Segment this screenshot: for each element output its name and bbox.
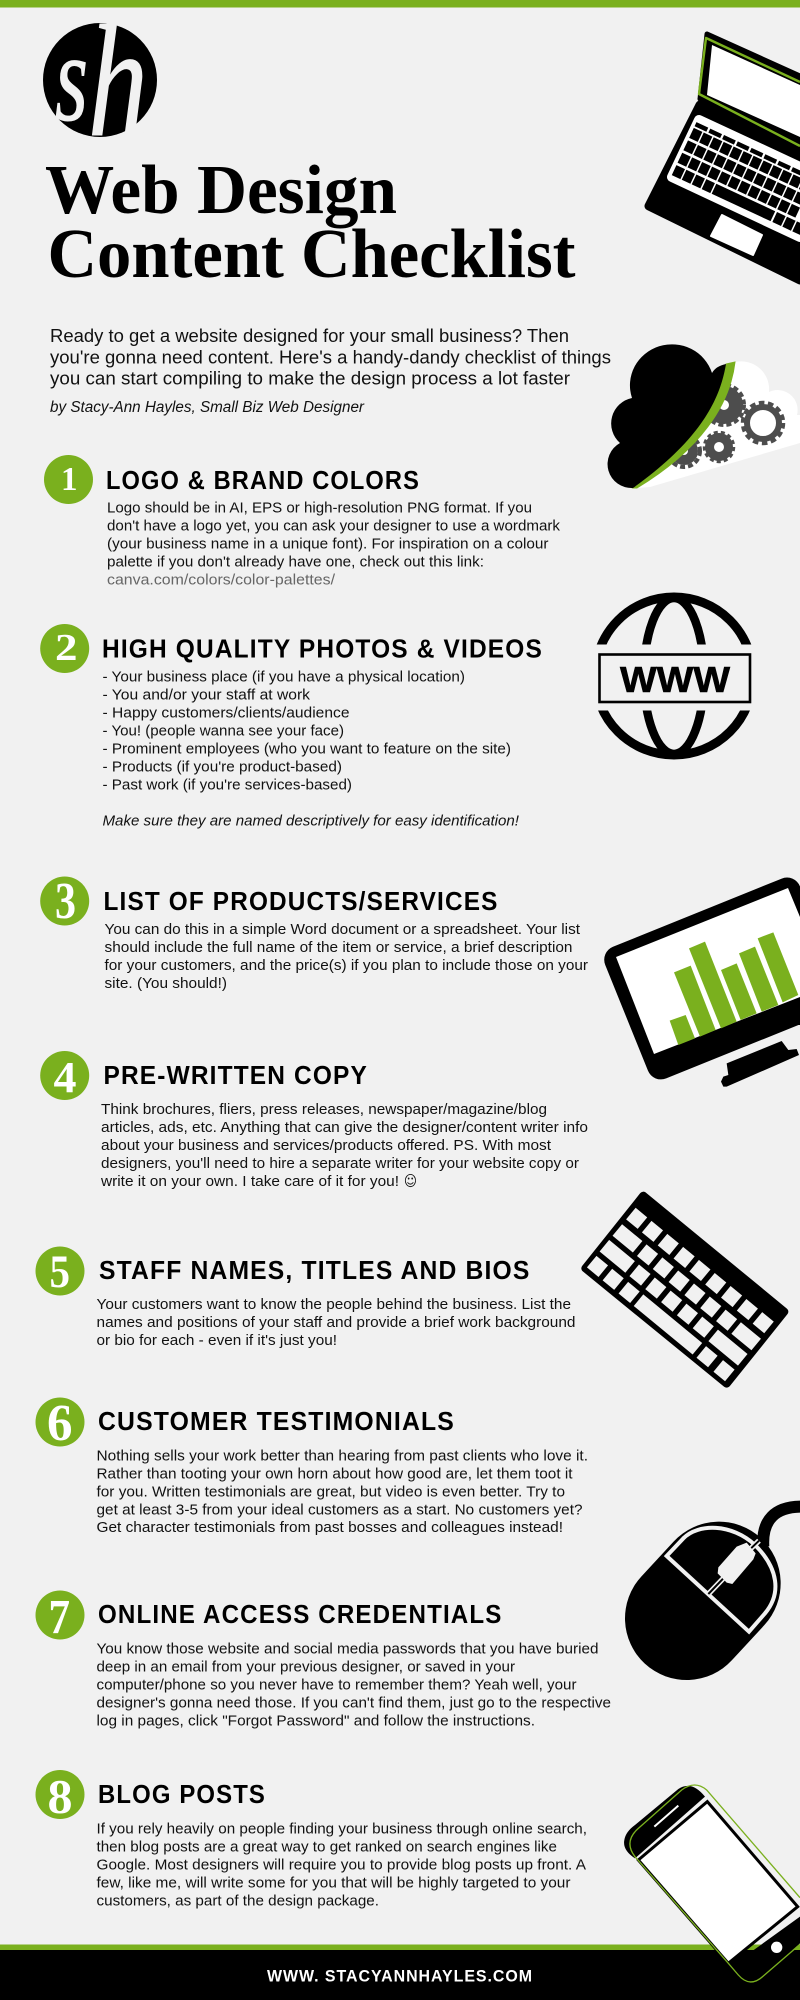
number badge 6: 6 xyxy=(47,1395,72,1452)
number badge 4: 4 xyxy=(54,1053,76,1102)
body text 4: Think brochures, fliers, press releases, newspaper/magazine/blog xyxy=(101,1102,547,1118)
section 5: staff names xyxy=(36,1246,576,1349)
body text 8: few, like me, will write some for you that will be highly targeted to your xyxy=(96,1876,571,1892)
icon: www globe xyxy=(595,597,753,755)
body text 1 xyxy=(107,501,561,589)
icon: monitor with bar chart xyxy=(600,873,800,1087)
body text 3: site. (You should!) xyxy=(104,976,227,992)
body list 2: - Products (if you're product-based) xyxy=(102,760,342,776)
body text 3: You can do this in a simple Word document or a spreadsheet. Your list xyxy=(104,922,580,938)
icon: keyboard xyxy=(585,1196,784,1384)
intro text xyxy=(50,325,611,388)
number badge 3: 3 xyxy=(55,873,76,930)
body text 3 xyxy=(104,922,588,992)
number badge 5 xyxy=(36,1246,84,1298)
italic note 2: Make sure they are named descriptively for easy identification! xyxy=(102,814,519,830)
body text 5: or bio for each - even if it's just you! xyxy=(96,1333,337,1349)
heading 7: ONLINE ACCESS CREDENTIALS xyxy=(98,1601,502,1629)
heading 4: PRE-WRITTEN COPY xyxy=(104,1062,368,1090)
body text 3: should include the full name of the item or service, a brief description xyxy=(104,940,572,956)
body text 7 xyxy=(96,1642,611,1730)
body text 1: Logo should be in AI, EPS or high-resolution PNG format. If you xyxy=(107,501,532,517)
number badge 8 xyxy=(36,1769,84,1824)
body text 6 xyxy=(96,1448,588,1536)
heading 3: LIST OF PRODUCTS/SERVICES xyxy=(104,888,498,916)
body text 7: You know those website and social media passwords that you have buried xyxy=(96,1642,598,1658)
body text 4: write it on your own. I take care of it for you! xyxy=(100,1174,399,1190)
footer band xyxy=(0,1944,800,2000)
number badge 5: 5 xyxy=(50,1246,70,1298)
body text 4: articles, ads, etc. Anything that can give the designer/content writer info xyxy=(101,1120,588,1136)
body text 6: Get character testimonials from past bosses and colleagues instead! xyxy=(96,1520,563,1536)
top green bar xyxy=(0,0,800,8)
section 3: products and services xyxy=(40,873,588,992)
intro text: Ready to get a website designed for your small business? Then xyxy=(50,325,569,346)
body text 7: log in pages, click "Forgot Password" and follow the instructions. xyxy=(96,1714,535,1730)
body text 1: canva.com/colors/color-palettes/ xyxy=(107,573,336,589)
body text 6: Nothing sells your work better than hearing from past clients who love it. xyxy=(96,1448,588,1464)
body text 6: get at least 3-5 from your ideal customers as a start. No customers yet? xyxy=(96,1502,582,1518)
body text 6: for you. Written testimonials are great, but video is even better. Try to xyxy=(96,1484,565,1500)
logo: sh monogram: s xyxy=(55,10,88,148)
heading 2: HIGH QUALITY PHOTOS & VIDEOS xyxy=(102,636,543,664)
body text 4: ☺ xyxy=(404,1172,417,1190)
body text 3: for your customers, and the price(s) if you plan to include those on your xyxy=(104,958,588,974)
number badge 1: 1 xyxy=(61,461,78,498)
body text 5: Your customers want to know the people behind the business. List the xyxy=(96,1297,571,1313)
section 1: logo and brand colors xyxy=(44,455,561,589)
body text 8: If you rely heavily on people finding your business through online search, xyxy=(96,1822,587,1838)
body list 2: - Prominent employees (who you want to feature on the site) xyxy=(102,742,511,758)
body list 2: - You and/or your staff at work xyxy=(102,688,311,704)
body text 8: Google. Most designers will require you to provide blog posts up front. A xyxy=(96,1858,586,1874)
heading 6: CUSTOMER TESTIMONIALS xyxy=(98,1408,455,1436)
body text 6: Rather than tooting your own horn about how good are, let them toot it xyxy=(96,1466,572,1482)
number badge 2: 2 xyxy=(55,627,78,669)
number badge 7 xyxy=(36,1589,84,1644)
body text 4 xyxy=(100,1102,588,1190)
icon: cloud with gears xyxy=(608,344,800,488)
byline: by Stacy-Ann Hayles, Small Biz Web Designer xyxy=(50,399,365,416)
icon: www globe: WWW xyxy=(620,659,730,700)
body text 7: designer's gonna need those. If you can't find them, just go to the respective xyxy=(96,1696,611,1712)
body text 1: don't have a logo yet, you can ask your designer to use a wordmark xyxy=(107,519,561,535)
section 7: online access credentials xyxy=(36,1589,611,1730)
number badge 6 xyxy=(36,1395,84,1452)
body text 5: names and positions of your staff and provide a brief work background xyxy=(96,1315,576,1331)
logo: sh monogram xyxy=(43,0,157,170)
icon: laptop xyxy=(649,34,800,280)
body list 2 xyxy=(102,670,511,794)
heading 1: LOGO & BRAND COLORS xyxy=(106,467,420,495)
number badge 8: 8 xyxy=(48,1769,72,1824)
body list 2: - Your business place (if you have a physical location) xyxy=(102,670,465,686)
body list 2: - Happy customers/clients/audience xyxy=(102,706,350,722)
body text 4: about your business and services/products offered. PS. With most xyxy=(101,1138,551,1154)
body text 7: deep in an email from your previous designer, or saved in your xyxy=(96,1660,515,1676)
title xyxy=(45,152,576,293)
number badge 3 xyxy=(40,873,89,930)
body list 2: - Past work (if you're services-based) xyxy=(102,778,352,794)
section 2: photos and videos xyxy=(40,624,543,830)
icon: computer mouse xyxy=(667,1507,800,1632)
section 6: testimonials xyxy=(36,1395,588,1536)
intro text: you're gonna need content. Here's a handy-dandy checklist of things xyxy=(50,346,611,368)
chart bars xyxy=(670,932,798,1045)
number badge 1 xyxy=(44,455,93,504)
body text 8: customers, as part of the design package. xyxy=(96,1894,379,1910)
number badge 2 xyxy=(40,624,89,673)
body list 2: - You! (people wanna see your face) xyxy=(102,724,344,740)
number badge 4 xyxy=(40,1051,89,1102)
number badge 7: 7 xyxy=(48,1589,70,1644)
monitor stand xyxy=(721,1041,799,1087)
body text 4: designers, you'll need to hire a separate writer for your website copy or xyxy=(101,1156,579,1172)
heading 5: STAFF NAMES, TITLES AND BIOS xyxy=(99,1257,530,1285)
icon: smartphone xyxy=(624,1785,800,1982)
body text 1: palette if you don't already have one, check out this link: xyxy=(107,555,484,571)
body text 5 xyxy=(96,1297,576,1349)
body text 7: computer/phone so you never have to remember them? Yeah well, your xyxy=(96,1678,577,1694)
title: Web Design xyxy=(45,152,397,229)
heading 8: BLOG POSTS xyxy=(98,1781,266,1809)
title: Content Checklist xyxy=(48,216,576,293)
body text 8: then blog posts are a great way to get ranked on search engines like xyxy=(96,1840,557,1856)
body text 1: (your business name in a unique font). For inspiration on a colour xyxy=(107,537,549,553)
footer url: WWW. STACYANNHAYLES.COM xyxy=(267,1968,533,1986)
section 8: blog posts xyxy=(36,1769,587,1910)
intro text: you can start compiling to make the design process a lot faster xyxy=(50,368,570,388)
body text 8 xyxy=(96,1822,587,1910)
section 4: pre-written copy xyxy=(40,1051,588,1190)
